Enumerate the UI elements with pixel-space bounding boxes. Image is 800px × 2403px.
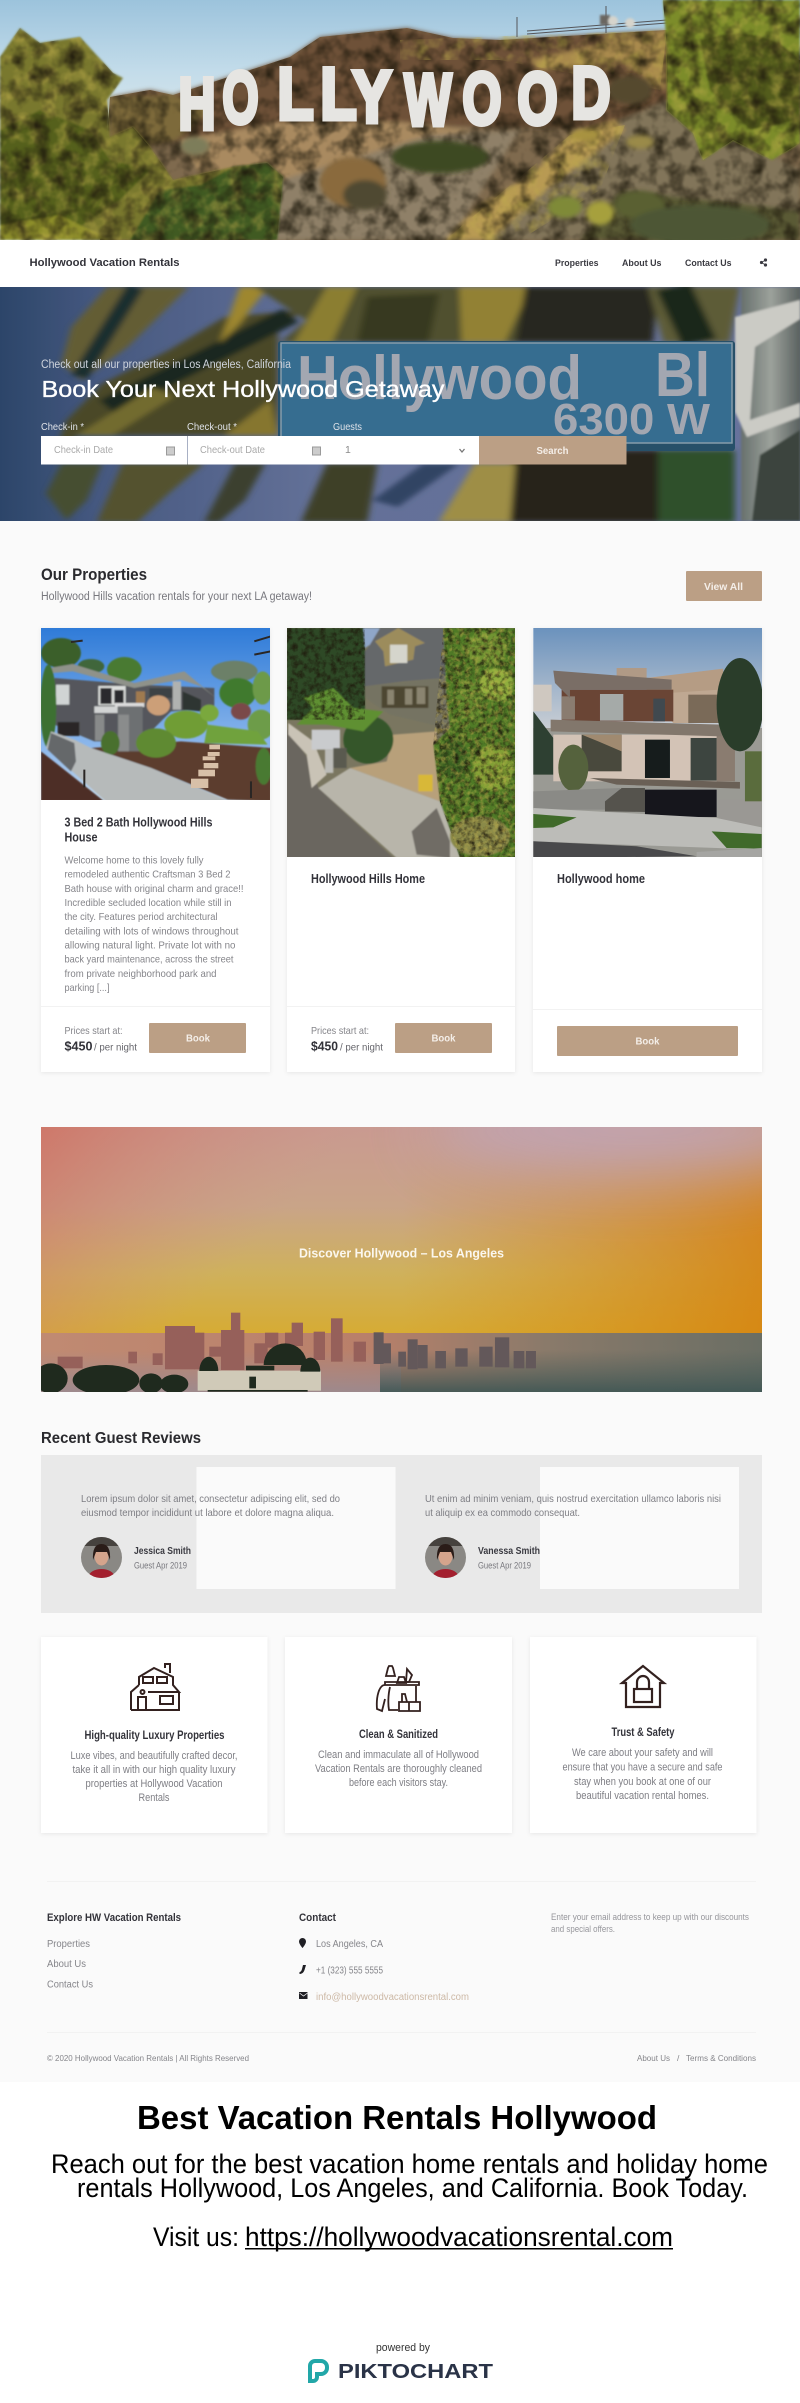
reviewer: Jessica Smith: [134, 1545, 191, 1557]
check-in field: Check-in Date: [54, 444, 113, 456]
section heading: our properties: [41, 565, 312, 603]
closing description: [51, 2149, 768, 2203]
book button: Book: [636, 1036, 660, 1048]
heading: Clean & Sanitized: [359, 1729, 438, 1741]
Hollywood letters: [180, 65, 610, 132]
field labels: Check-out *: [187, 421, 237, 433]
review 1: Lorem ipsum dolor sit amet, consectetur adipiscing elit, sed do: [81, 1493, 340, 1505]
website link: https://hollywoodvacationsrental.com: [245, 2222, 673, 2252]
feature card: clean and sanitized: [285, 1637, 512, 1833]
feature card: trust and safety: [530, 1637, 756, 1833]
price: / per night: [340, 1042, 383, 1054]
book button: Book: [432, 1032, 456, 1044]
Hollywood letters: O: [462, 59, 502, 140]
Hollywood letters: L: [320, 54, 356, 135]
text: take it all in with our high quality luxury: [72, 1764, 236, 1776]
footer column: contact: [299, 1912, 469, 2003]
nav links: [555, 258, 732, 269]
Hollywood letters: W: [404, 60, 452, 141]
title: Hollywood Hills Home: [311, 872, 425, 886]
description: back yard maintenance, across the street: [64, 954, 234, 966]
field labels: Guests: [333, 421, 362, 433]
price: [311, 1025, 383, 1054]
field labels: [41, 421, 362, 433]
headline: Book Your Next Hollywood Getaway: [42, 376, 445, 402]
check-out field: Check-out Date: [200, 444, 265, 456]
description: remodeled authentic Craftsman 3 Bed 2: [64, 869, 231, 881]
section heading: our properties: Our Properties: [41, 565, 147, 584]
Hollywood letters: Y: [352, 57, 392, 138]
text: Vacation Rentals are thoroughly cleaned: [315, 1763, 482, 1775]
footer links: Terms & Conditions: [686, 2053, 756, 2063]
avatar: [81, 1537, 122, 1578]
hero photo: Hollywood sign: [0, 0, 800, 245]
Hollywood letters: L: [278, 54, 314, 135]
view all button: [686, 571, 762, 601]
footer column: explore: About Us: [47, 1959, 86, 1970]
footer links: /: [677, 2053, 680, 2063]
guests field: [334, 436, 480, 464]
title: Hollywood home: [557, 872, 645, 886]
review 2: ut aliquip ex ea commodo consequat.: [425, 1507, 580, 1519]
text: [562, 1747, 722, 1802]
price: Prices start at:: [311, 1025, 369, 1037]
navigation bar: [0, 240, 800, 287]
description: detailing with lots of windows throughout: [64, 925, 239, 937]
review 2: Ut enim ad minim veniam, quis nostrud exercitation ullamco laboris nisi: [425, 1493, 721, 1505]
view all button: View All: [704, 581, 743, 593]
booking hero photo: Hollywood Blvd sign: [0, 287, 800, 522]
check-out field: [188, 436, 334, 464]
description: the city. Features period architectural: [64, 911, 218, 923]
hillside: [100, 28, 800, 245]
price: Prices start at:: [64, 1025, 122, 1037]
street sign: Hollywood: [297, 344, 582, 413]
price: / per night: [94, 1042, 137, 1054]
nav links: About Us: [622, 258, 662, 269]
title: [64, 816, 213, 844]
icon: share: [760, 259, 767, 266]
heading: High-quality Luxury Properties: [84, 1730, 224, 1742]
text: Rentals: [138, 1792, 170, 1804]
description: Incredible secluded location while still in: [64, 897, 232, 909]
reviews panel: [41, 1455, 762, 1613]
feature card: luxury properties: [41, 1637, 268, 1833]
closing title: Best Vacation Rentals Hollywood: [137, 2099, 657, 2136]
book button: [557, 1026, 738, 1056]
text: Clean and immaculate all of Hollywood: [318, 1749, 479, 1761]
text: [315, 1749, 482, 1789]
footer column: explore: Explore HW Vacation Rentals: [47, 1912, 181, 1924]
skyline: [34, 1313, 762, 1395]
closing description: Reach out for the best vacation home rentals and holiday home: [51, 2149, 768, 2179]
price: [64, 1025, 137, 1054]
review 1: [81, 1493, 340, 1585]
avatar: [425, 1537, 466, 1578]
text: We care about your safety and will: [572, 1747, 713, 1759]
piktochart logo: PIKTOCHART: [338, 2361, 493, 2383]
icon: logo mark: [310, 2361, 327, 2381]
footer links: [637, 2053, 756, 2063]
nav links: Contact Us: [685, 258, 732, 269]
copyright: © 2020 Hollywood Vacation Rentals | All Rights Reserved: [47, 2053, 249, 2063]
Hollywood letters: H: [178, 64, 216, 145]
price: $450: [64, 1040, 93, 1054]
Hollywood letters: O: [222, 58, 258, 139]
icon: phone: [300, 1965, 306, 1974]
description: from private neighborhood park and: [64, 968, 217, 980]
footer links: About Us: [637, 2053, 670, 2063]
footer column: explore: [47, 1912, 181, 1990]
text: properties at Hollywood Vacation: [86, 1778, 222, 1790]
title: 3 Bed 2 Bath Hollywood Hills: [64, 816, 213, 830]
price: $450: [311, 1040, 338, 1054]
footer: [47, 1881, 756, 2063]
footer column: contact: Contact: [299, 1912, 336, 1924]
icon: cleaning supplies: [377, 1666, 420, 1711]
property card 2: [287, 628, 517, 1072]
tagline: Check out all our properties in Los Angeles, California: [41, 359, 292, 371]
footer column: contact: info@hollywoodvacationsrental.com: [316, 1992, 469, 2003]
text: stay when you book at one of our: [574, 1776, 711, 1788]
photo: house with ivy: [287, 628, 517, 858]
street sign: [278, 341, 735, 451]
icon: envelope: [299, 1992, 308, 1999]
closing description: rentals Hollywood, Los Angeles, and California. Book Today.: [77, 2173, 748, 2203]
nav links: Properties: [555, 258, 598, 269]
lamp post: [735, 287, 800, 521]
foreground trees: [0, 0, 800, 240]
book button: [395, 1023, 492, 1053]
site name: Hollywood Vacation Rentals: [30, 257, 180, 269]
section heading: our properties: Hollywood Hills vacation rentals for your next LA getaway!: [41, 591, 312, 603]
footer column: contact: +1 (323) 555 5555: [316, 1966, 383, 1976]
search button: [479, 436, 626, 464]
reviewer: Vanessa Smith: [478, 1545, 540, 1557]
property card 1: [40, 628, 274, 1072]
footer column: newsletter: [551, 1912, 749, 1934]
description: [64, 854, 244, 994]
book button: Book: [186, 1032, 210, 1044]
website link: Visit us:: [153, 2222, 239, 2252]
Hollywood letters: D: [572, 53, 610, 134]
book button: [149, 1023, 246, 1053]
footer column: newsletter: and special offers.: [551, 1924, 615, 1934]
section heading: recent guest reviews: Recent Guest Reviews: [41, 1430, 201, 1447]
text: ensure that you have a secure and safe: [562, 1762, 722, 1774]
text: Luxe vibes, and beautifully crafted decor,: [70, 1750, 238, 1762]
photo: craftsman house: [40, 628, 274, 801]
icon: pin: [299, 1938, 306, 1948]
heading: Trust & Safety: [612, 1727, 675, 1739]
review 2: [425, 1493, 721, 1585]
description: Bath house with original charm and grace!!: [64, 883, 244, 895]
review 1: Guest Apr 2019: [134, 1560, 187, 1570]
check-in field: [41, 436, 187, 464]
street sign: 6300 W: [553, 395, 710, 444]
photo: modern house: [533, 628, 763, 858]
title: House: [64, 830, 98, 844]
search button: Search: [536, 446, 568, 457]
icon: house: [131, 1664, 179, 1710]
footer column: explore: Properties: [47, 1939, 90, 1950]
powered by label: powered by: [376, 2342, 430, 2354]
footer column: contact: Los Angeles, CA: [316, 1939, 383, 1950]
icon: house with padlock: [622, 1666, 664, 1707]
text: [70, 1750, 238, 1804]
footer column: newsletter: Enter your email address to keep up with our discounts: [551, 1912, 749, 1922]
property card 3: [533, 628, 763, 1072]
street sign: Bl: [655, 341, 710, 410]
description: parking [...]: [64, 982, 110, 994]
footer column: explore: Contact Us: [47, 1980, 93, 1990]
text: before each visitors stay.: [349, 1777, 448, 1789]
palm fronds: [46, 287, 740, 522]
description: Welcome home to this lovely fully: [64, 854, 204, 866]
review 1: eiusmod tempor incididunt ut labore et dolore magna aliqua.: [81, 1507, 334, 1519]
review 2: Guest Apr 2019: [478, 1560, 531, 1570]
banner caption: Discover Hollywood – Los Angeles: [299, 1246, 504, 1260]
main page background: [0, 521, 800, 2082]
Hollywood letters: O: [518, 59, 558, 140]
banner: Los Angeles skyline at sunset: [41, 1127, 762, 1392]
description: allowing natural light. Private lot with no: [64, 939, 236, 951]
text: beautiful vacation rental homes.: [576, 1790, 709, 1802]
guests field: 1: [345, 444, 351, 456]
field labels: Check-in *: [41, 421, 84, 433]
booking hero text and search form: [41, 359, 626, 464]
